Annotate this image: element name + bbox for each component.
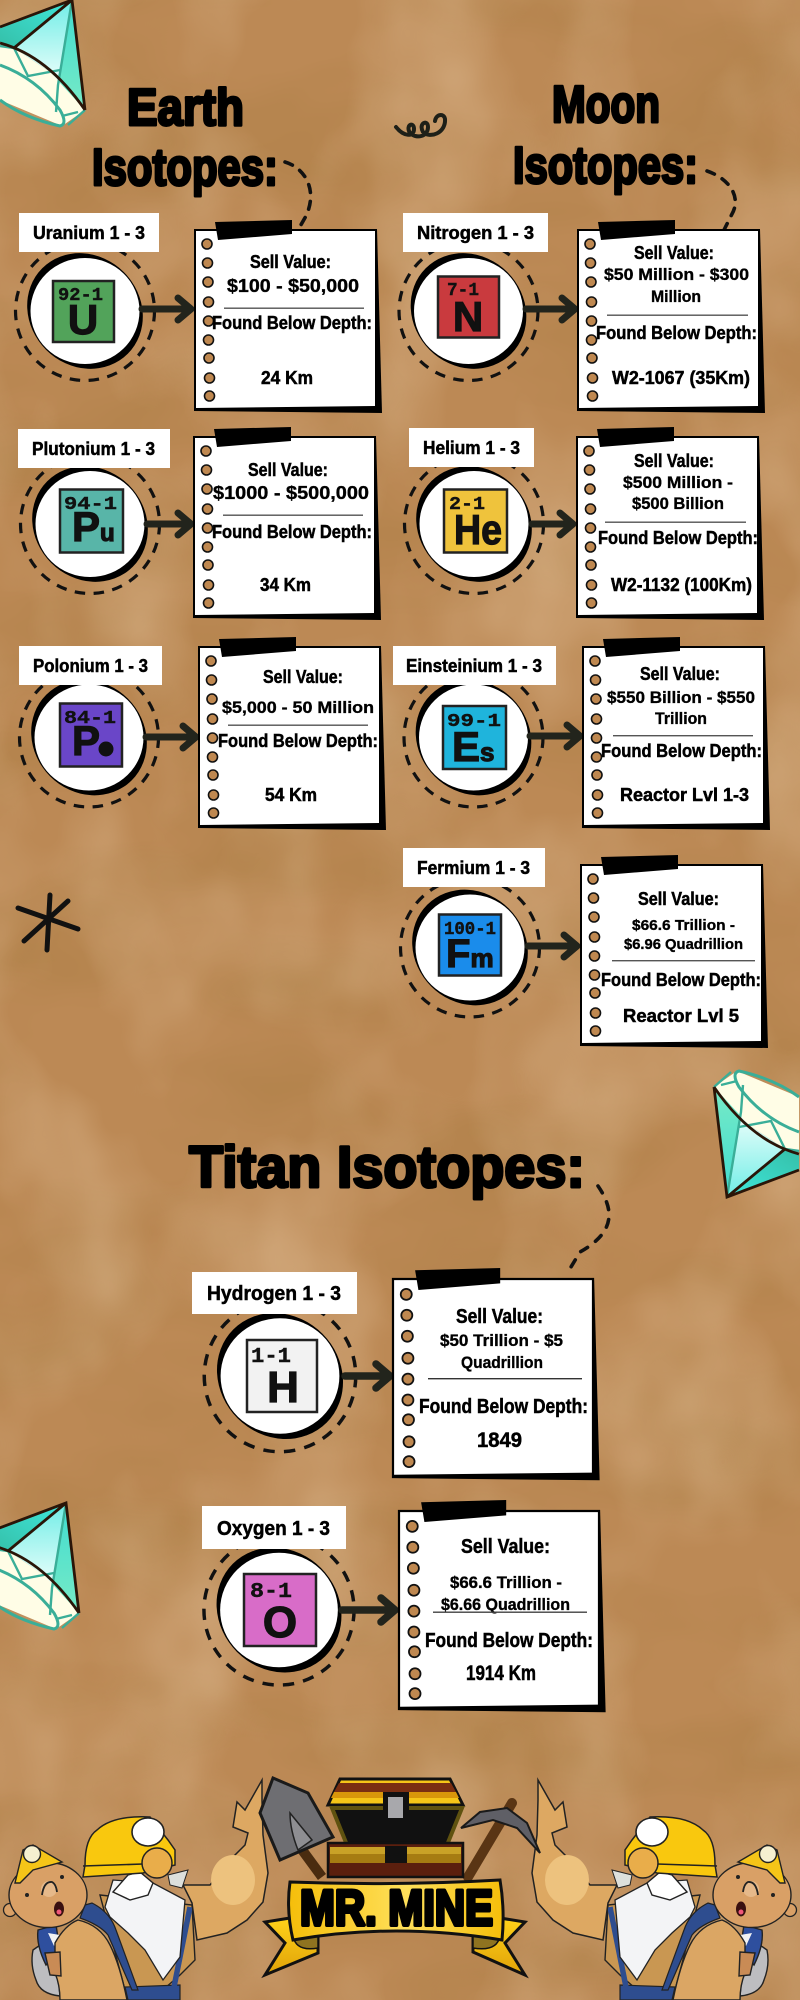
note text: Sell Value: — [263, 667, 343, 687]
note text: $66.6 Trillion - — [632, 917, 735, 934]
icon: Uranium tile: 92-1 — [58, 286, 103, 306]
note text: Found Below Depth: — [212, 522, 372, 542]
heading: Earth Isotopes: Isotopes: — [92, 139, 278, 197]
icon: Einsteinium circle — [392, 656, 555, 819]
note card — [580, 855, 768, 1048]
note text: $50 Trillion - $5 — [440, 1331, 563, 1350]
arrow: dashed Earth — [285, 162, 311, 230]
note text: $550 Billion - $550 — [607, 688, 755, 707]
icon: Oxygen tile: 8-1 — [250, 1581, 292, 1604]
label — [403, 213, 548, 252]
label — [18, 429, 170, 468]
note text: Sell Value: — [461, 1536, 550, 1558]
note text: Found Below Depth: — [601, 970, 761, 990]
icon: Hydrogen tile — [247, 1340, 317, 1412]
note text — [596, 243, 757, 388]
icon: diamond top left — [0, 0, 85, 126]
heading: Earth Isotopes — [92, 79, 278, 197]
label — [192, 1272, 357, 1314]
note card — [198, 637, 386, 830]
note text: $1000 - $500,000 — [213, 483, 369, 503]
note text — [601, 664, 762, 805]
label — [409, 428, 534, 467]
icon: Polonium tile — [60, 704, 122, 766]
note text: Sell Value: — [634, 243, 714, 263]
arrow — [142, 298, 191, 320]
icon: Helium tile: He — [454, 506, 502, 553]
icon: pickaxe — [461, 1803, 540, 1877]
arrow: dashed Moon — [707, 171, 735, 230]
note text: Sell Value: — [634, 451, 714, 471]
doodle: squiggle — [396, 115, 445, 136]
label — [393, 646, 556, 685]
logo: Mr. Mine — [260, 1778, 540, 1975]
icon: Einsteinium tile: 99-1 — [447, 712, 501, 732]
heading: Earth Isotopes: Earth — [127, 79, 244, 137]
icon: Fermium tile: 100-1 — [444, 920, 496, 940]
note text — [212, 252, 372, 388]
note text: Quadrillion — [461, 1353, 543, 1372]
note card — [576, 427, 764, 620]
note card — [398, 1500, 606, 1712]
icon: Oxygen circle — [191, 1522, 367, 1698]
icon: Plutonium tile: 94-1 — [64, 495, 117, 515]
note text: 54 Km — [265, 785, 317, 805]
label — [19, 646, 162, 685]
illustration: right miners — [532, 1780, 796, 2000]
icon: Oxygen tile — [244, 1574, 316, 1647]
icon: Nitrogen tile: N — [453, 293, 483, 340]
icon: Hydrogen tile: 1-1 — [251, 1346, 291, 1369]
note text: Found Below Depth: — [601, 741, 762, 761]
arrow: dashed Titan — [568, 1186, 609, 1272]
isotope: Nitrogen — [387, 213, 765, 413]
icon: Helium tile: 2-1 — [449, 495, 485, 515]
note text: Found Below Depth: — [212, 313, 372, 333]
label: Nitrogen 1 - 3 — [417, 223, 534, 243]
icon: Nitrogen tile: 7-1 — [447, 281, 479, 301]
label: Uranium 1 - 3 — [33, 223, 145, 243]
note card — [194, 220, 382, 413]
note card — [193, 427, 381, 620]
heading: Titan Isotopes: Titan Isotopes: — [189, 1135, 585, 1200]
note text: 1849 — [477, 1429, 522, 1452]
icon: Plutonium tile — [60, 490, 123, 552]
icon: Helium tile — [444, 490, 507, 553]
note text: Found Below Depth: — [598, 528, 758, 548]
isotope: Fermium — [388, 848, 768, 1048]
doodle: asterisk — [18, 895, 78, 950]
icon: Uranium circle — [3, 229, 167, 393]
icon: Fermium circle — [388, 866, 552, 1029]
note text: $5,000 - 50 Million — [222, 698, 374, 717]
note text: $66.6 Trillion - — [450, 1573, 562, 1592]
label: Helium 1 - 3 — [423, 438, 520, 458]
icon: Nitrogen circle — [387, 229, 550, 393]
note text: Found Below Depth: — [596, 323, 757, 343]
label: Polonium 1 - 3 — [33, 656, 148, 676]
note text — [212, 460, 372, 595]
label — [202, 1506, 346, 1549]
isotope: Plutonium — [8, 427, 381, 620]
icon: treasure chest — [328, 1779, 463, 1877]
label: Hydrogen 1 - 3 — [207, 1283, 341, 1305]
icon: Plutonium tile: Pu — [72, 503, 115, 550]
isotope: Einsteinium — [392, 637, 770, 830]
isotope: Oxygen — [191, 1500, 606, 1712]
note text: $6.96 Quadrillion — [624, 936, 743, 953]
note text: Found Below Depth: — [218, 731, 378, 751]
illustration: left miners — [4, 1780, 268, 2000]
icon: shovel — [260, 1778, 333, 1877]
icon: Hydrogen tile: H — [267, 1363, 299, 1412]
note text: $100 - $50,000 — [227, 276, 359, 296]
icon: Helium circle — [392, 442, 556, 606]
icon: Uranium tile: U — [68, 296, 98, 343]
arrow — [342, 1598, 395, 1622]
arrow — [147, 513, 191, 535]
icon: Polonium tile: P — [72, 717, 100, 764]
note text: $500 Million - — [623, 473, 733, 492]
note card — [582, 637, 770, 830]
label: Fermium 1 - 3 — [417, 858, 530, 878]
note text: Trillion — [655, 709, 707, 728]
icon: Hydrogen circle — [191, 1287, 369, 1465]
heading: Moon Isotopes: Moon — [552, 76, 660, 134]
note text — [425, 1536, 593, 1685]
note text — [218, 667, 378, 805]
note text: Sell Value: — [248, 460, 328, 480]
label: Oxygen 1 - 3 — [217, 1518, 330, 1540]
heading: Moon Isotopes: Isotopes: — [513, 137, 698, 195]
note text — [601, 889, 761, 1026]
icon: Plutonium circle — [8, 442, 172, 606]
isotope: Helium — [392, 427, 764, 620]
note text: Found Below Depth: — [419, 1396, 588, 1418]
arrow — [345, 1364, 390, 1388]
note text: Found Below Depth: — [425, 1630, 593, 1652]
arrow — [528, 935, 577, 957]
icon: Einsteinium tile: Es — [452, 723, 494, 770]
note text: $500 Billion — [632, 494, 724, 513]
note card — [392, 1268, 600, 1480]
isotope: Hydrogen — [191, 1268, 600, 1480]
banner: MR. MINE — [300, 1880, 493, 1936]
note text: W2-1067 (35Km) — [612, 368, 750, 388]
arrow — [526, 298, 575, 320]
note text: 34 Km — [260, 575, 311, 595]
icon: Oxygen tile: O — [263, 1598, 297, 1647]
note text — [419, 1306, 588, 1452]
label — [403, 848, 545, 887]
icon: Polonium circle — [7, 656, 171, 819]
note text — [598, 451, 758, 595]
note text: Sell Value: — [638, 889, 719, 909]
icon: Fermium tile — [439, 914, 501, 976]
label — [19, 213, 159, 252]
icon: Fermium tile: Fm — [446, 932, 494, 976]
note text: Sell Value: — [640, 664, 720, 684]
note text: Million — [651, 287, 701, 306]
label: Plutonium 1 - 3 — [32, 439, 155, 459]
note text: $6.66 Quadrillion — [441, 1595, 570, 1614]
note card — [577, 220, 765, 413]
banner — [265, 1880, 525, 1975]
icon: Einsteinium tile — [443, 706, 506, 770]
note text: $50 Million - $300 — [604, 265, 749, 284]
note text: Sell Value: — [456, 1306, 543, 1328]
label: Einsteinium 1 - 3 — [406, 656, 542, 676]
arrow — [530, 725, 580, 747]
icon: diamond lower left — [0, 1503, 79, 1629]
arrow — [532, 513, 573, 535]
note text: Reactor Lvl 5 — [623, 1006, 739, 1026]
icon: diamond right — [714, 1071, 799, 1197]
isotope: Polonium — [7, 637, 386, 830]
isotope: Uranium — [3, 213, 382, 413]
icon: Nitrogen tile — [438, 276, 499, 340]
note text: 24 Km — [261, 368, 313, 388]
note text: W2-1132 (100Km) — [611, 575, 752, 595]
icon: Polonium tile: 84-1 — [64, 709, 116, 729]
note text: Sell Value: — [250, 252, 331, 272]
icon: Uranium tile — [53, 281, 114, 343]
heading: Moon Isotopes — [513, 76, 698, 195]
note text: Reactor Lvl 1-3 — [620, 785, 749, 805]
note text: 1914 Km — [466, 1662, 536, 1685]
arrow — [146, 726, 196, 748]
